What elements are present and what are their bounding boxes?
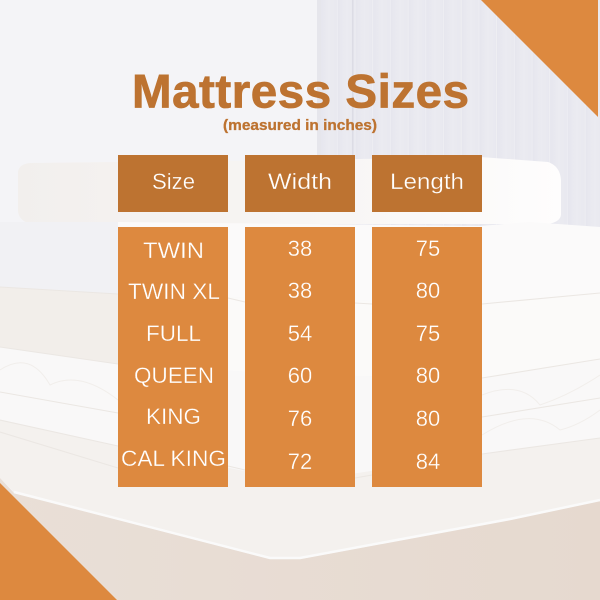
column: size names: FULL [146,321,201,346]
column: length values: 80 [416,363,440,388]
column: width values: 76 [288,406,312,431]
column: size names: TWIN [143,238,204,263]
column: width values: 38 [288,278,312,303]
decorative triangle: bottom left [0,483,117,600]
column: length values: 80 [416,278,440,303]
column: width values: 38 [288,236,312,261]
decorative triangle: top right [481,0,598,117]
column header: Size: Size [152,169,195,194]
column header: Length [372,155,482,212]
column header: Size [118,155,228,212]
column: size names: QUEEN [134,363,214,388]
column: length values: 75 [416,236,440,261]
column: width values [245,227,355,487]
title: Mattress Sizes [132,66,469,118]
column: length values: 80 [416,406,440,431]
column: size names: KING [146,404,201,429]
subtitle: (measured in inches) [223,118,377,134]
column header: Width [245,155,355,212]
column: width values: 60 [288,363,312,388]
column: size names [118,227,228,487]
column: size names: CAL KING [121,446,226,471]
column: size names: TWIN XL [128,279,220,304]
column: width values: 54 [288,321,312,346]
column header: Width: Width [268,169,332,194]
column: length values [372,227,482,487]
column header: Length: Length [390,169,464,194]
column: length values: 84 [416,449,440,474]
column: length values: 75 [416,321,440,346]
column: width values: 72 [288,449,312,474]
